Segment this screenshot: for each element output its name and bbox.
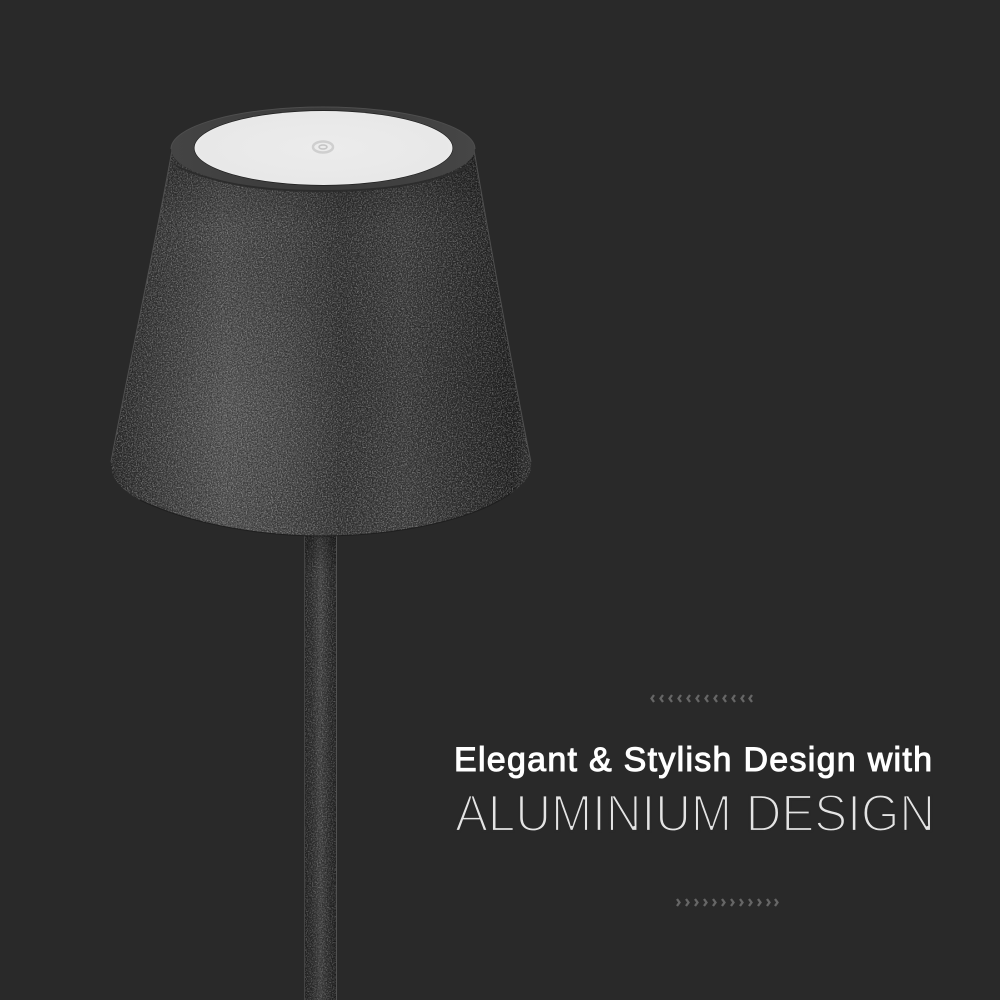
heading: Elegant & Stylish Design with (454, 741, 932, 779)
lamp shade body (105, 150, 537, 540)
lamp top rim (171, 107, 475, 191)
bottom chevron divider (677, 899, 778, 906)
lamp illustration (105, 107, 537, 1000)
top chevron divider (652, 695, 752, 702)
lamp white top diffuser (194, 110, 453, 186)
subheading: ALUMINIUM DESIGN (455, 785, 935, 843)
lamp pole (304, 530, 337, 1000)
touch switch icon (313, 142, 333, 152)
infographic canvas (110, 106, 930, 1000)
